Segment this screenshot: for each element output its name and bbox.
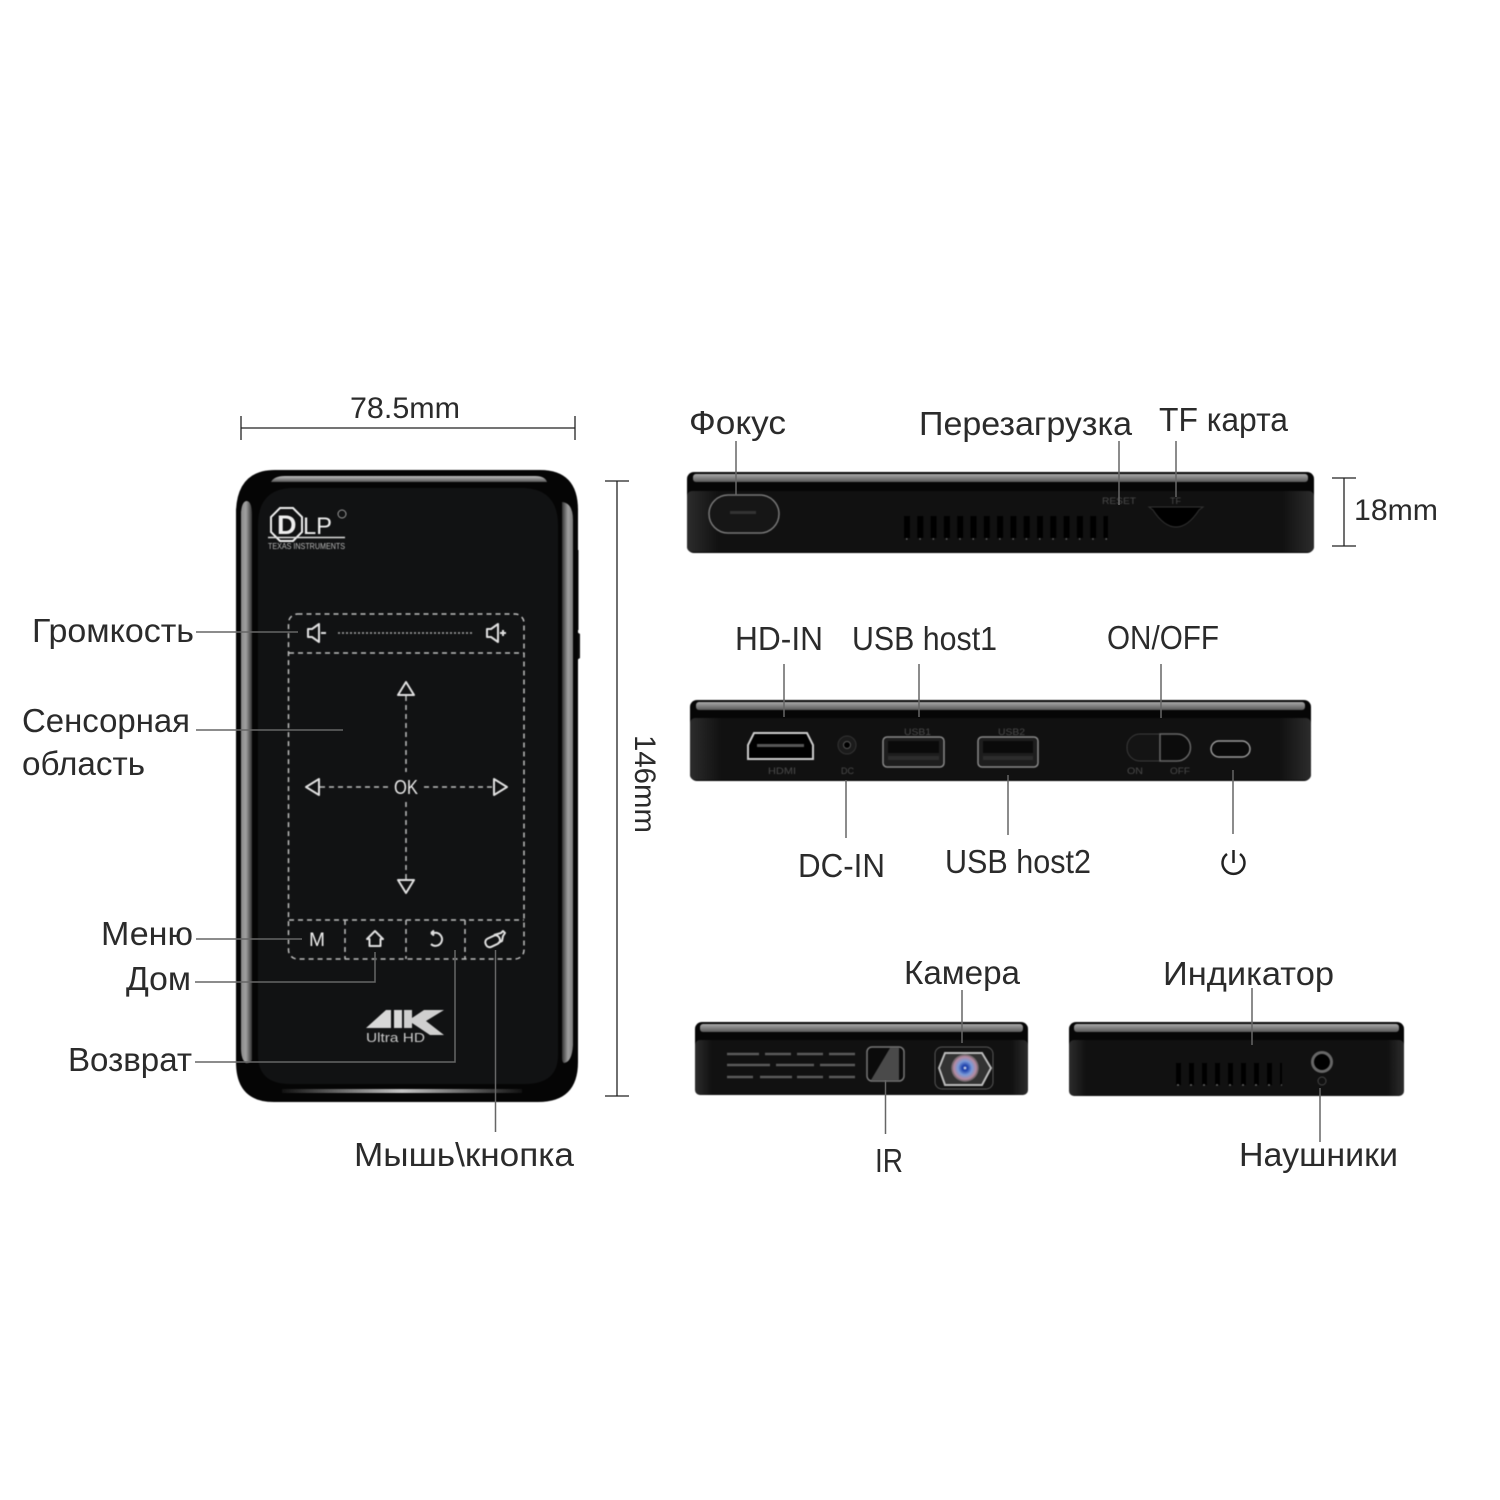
- label: Дом: [126, 952, 375, 997]
- right highlight: [562, 502, 573, 1063]
- power button: [1211, 741, 1250, 757]
- label: Меню: Меню: [101, 915, 193, 952]
- panel: back side view: [1069, 1022, 1404, 1096]
- logo: DLP Texas Instruments: LP: [303, 513, 332, 540]
- reset label: RESET: [1102, 496, 1137, 506]
- dimension: thickness 18mm: 18mm: [1354, 494, 1438, 527]
- label: Наушники: Наушники: [1239, 1136, 1398, 1173]
- logo: DLP Texas Instruments: D: [277, 510, 296, 540]
- panel: front side view with camera: [695, 1022, 1028, 1095]
- focus wheel: [709, 495, 779, 533]
- label: Возврат: [68, 950, 455, 1078]
- label: IR: IR: [875, 1142, 903, 1179]
- label: Сенсорная область: [22, 702, 343, 782]
- camera lens: [935, 1047, 993, 1089]
- panel: ports side view: HDMI: [768, 766, 796, 776]
- menu button M: M: [309, 930, 325, 951]
- label: Возврат: Возврат: [68, 1041, 192, 1078]
- direction arrows and OK: [306, 682, 507, 893]
- vents: [1176, 1074, 1282, 1085]
- label: USB host2: USB host2: [945, 843, 1091, 880]
- home button: [367, 931, 383, 946]
- device body: [236, 470, 578, 1102]
- mouse button: [484, 931, 505, 948]
- label: TF карта: [1159, 401, 1289, 497]
- bottom highlight: [282, 1089, 522, 1093]
- label: Мышь\кнопка: Мышь\кнопка: [354, 1136, 575, 1173]
- label: Громкость: Громкость: [32, 612, 194, 649]
- panel: ports side view: OFF: [1170, 766, 1191, 776]
- label: Камера: Камера: [904, 954, 1021, 991]
- label: ON/OFF: [1107, 619, 1219, 718]
- top highlight: [271, 476, 547, 482]
- volume slider: [338, 632, 474, 634]
- TF slot: [1149, 507, 1203, 527]
- label: DC-IN: [798, 780, 885, 884]
- label: power icon: [1223, 770, 1245, 874]
- dimension: width 78.5mm: 78.5mm: [350, 392, 460, 425]
- label: HD-IN: HD-IN: [735, 620, 823, 657]
- logo: 4K Ultra HD: [366, 1010, 444, 1045]
- dimension: height 146mm: 146mm: [628, 735, 661, 833]
- logo: 4K Ultra HD: Ultra HD: [366, 1030, 425, 1045]
- logo: DLP Texas Instruments: TEXAS INSTRUMENTS: [268, 541, 345, 551]
- label: Сенсорная область: Сенсорная: [22, 702, 190, 739]
- label: Фокус: [689, 404, 786, 495]
- label: Сенсорная область: область: [22, 745, 145, 782]
- USB1 port: [883, 737, 944, 767]
- label: ON/OFF: ON/OFF: [1107, 619, 1219, 656]
- label: HD-IN: [735, 620, 823, 717]
- left highlight: [241, 501, 252, 1063]
- vents: [727, 1054, 855, 1077]
- DC port: [838, 736, 856, 754]
- vents: [904, 527, 1108, 539]
- label: Индикатор: Индикатор: [1163, 955, 1334, 992]
- HDMI port: [748, 733, 813, 759]
- label: IR: [875, 1080, 903, 1179]
- label: Дом: Дом: [126, 960, 191, 997]
- touch panel outline: [288, 614, 524, 959]
- panel: top side view: [687, 472, 1314, 553]
- USB2 label: USB2: [998, 727, 1025, 737]
- panel: ports side view: DC: [841, 766, 854, 776]
- dimension: thickness 18mm: [1332, 478, 1438, 546]
- back button: [431, 930, 442, 946]
- panel: ports side view: [690, 700, 1311, 781]
- label: Фокус: Фокус: [689, 404, 786, 441]
- label: Перезагрузка: Перезагрузка: [919, 405, 1133, 442]
- power switch: [1127, 734, 1190, 761]
- USB1 label: USB1: [904, 727, 931, 737]
- USB2 port: [978, 737, 1038, 767]
- volume down icon: [308, 624, 326, 642]
- direction arrows and OK: OK: [394, 777, 419, 799]
- touch face: [258, 488, 558, 1084]
- headphone jack: [1312, 1052, 1332, 1085]
- label: DC-IN: DC-IN: [798, 847, 885, 884]
- volume up icon: [487, 624, 506, 642]
- label: Камера: [904, 954, 1021, 1043]
- panel: projector front view: [236, 470, 580, 1102]
- label: USB host1: USB host1: [852, 620, 997, 657]
- logo: DLP Texas Instruments: [268, 508, 346, 551]
- side buttons: [576, 550, 580, 660]
- TF label: TF: [1170, 496, 1181, 506]
- panel: ports side view: ON: [1127, 766, 1143, 776]
- label: TF карта: TF карта: [1159, 401, 1289, 438]
- IR window: [867, 1047, 904, 1081]
